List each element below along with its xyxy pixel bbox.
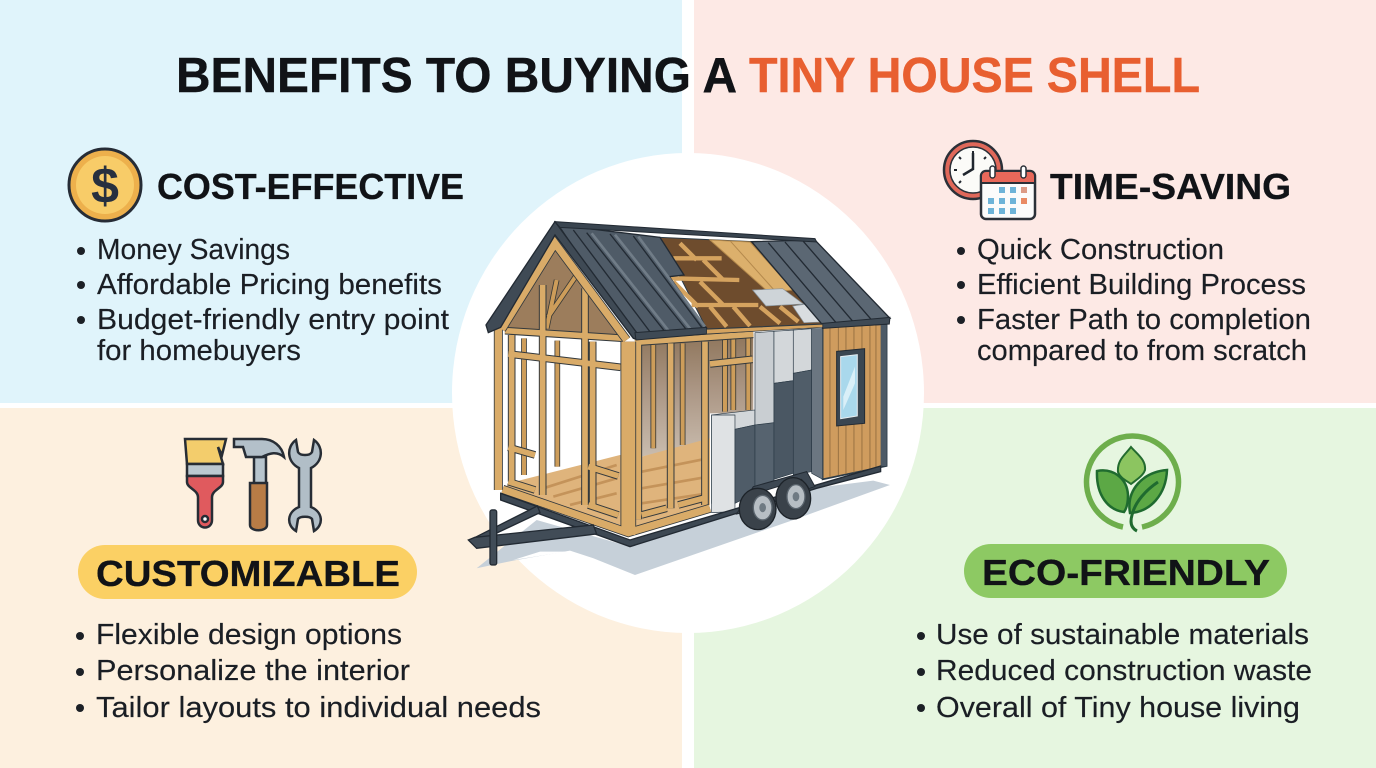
list: time-saving points: Quick Construction (977, 234, 1224, 266)
list: eco-friendly points: Overall of Tiny house living (936, 692, 1300, 724)
list: time-saving points: Faster Path to completion (977, 304, 1311, 336)
icon: dollar coin (69, 149, 141, 221)
panel: customizable background (0, 408, 682, 768)
panel: cost-effective background (0, 0, 682, 403)
heading pill: customizable (78, 545, 417, 599)
panel content: customizable (76, 439, 541, 724)
wall framing studs (498, 243, 753, 535)
top plate (707, 324, 823, 334)
metal roof left (558, 225, 707, 338)
roof foil (753, 289, 803, 306)
panel content: eco-friendly (917, 436, 1312, 724)
list: cost-effective points: Money Savings (97, 234, 290, 266)
trailer hitch (468, 506, 597, 565)
icon: clock and calendar (944, 141, 1035, 219)
roof deck opening (660, 237, 823, 329)
heading pill: customizable: CUSTOMIZABLE (96, 553, 400, 594)
list: cost-effective points (77, 234, 449, 367)
list: eco-friendly points (917, 619, 1312, 724)
roof rafters (669, 243, 798, 327)
list: cost-effective points: Budget-friendly entry point (97, 304, 449, 336)
trailer frame (501, 466, 881, 547)
title: BENEFITS TO BUYING A (176, 49, 737, 103)
icon: wrench (289, 440, 321, 531)
list: cost-effective points: for homebuyers (97, 335, 301, 367)
icon: hammer (234, 439, 284, 530)
ground shadow (477, 481, 890, 575)
white opening through front wall (503, 243, 627, 520)
heading: cost-effective: COST-EFFECTIVE (157, 166, 464, 207)
icon: dollar coin: $ (91, 158, 119, 214)
icon: leaves in ring (1086, 436, 1178, 531)
icon: paint brush (185, 439, 226, 528)
heading pill: eco-friendly (964, 544, 1287, 598)
roof ridge and eaves (555, 222, 817, 242)
panel: eco-friendly background (694, 408, 1376, 768)
window (837, 349, 865, 426)
list: time-saving points (957, 234, 1311, 367)
sheathing panels (712, 329, 823, 513)
list: customizable points: Personalize the interior (96, 655, 410, 687)
illustration: tiny house shell on trailer (468, 222, 890, 575)
list: customizable points (76, 619, 541, 724)
list: eco-friendly points: Use of sustainable materials (936, 619, 1309, 651)
heading pill: eco-friendly: ECO-FRIENDLY (982, 552, 1270, 593)
metal roof right (752, 240, 890, 325)
wheel fender (737, 472, 815, 514)
title (176, 49, 1200, 103)
list: eco-friendly points: Reduced construction waste (936, 655, 1312, 687)
rear wheel (776, 478, 811, 519)
side wall wood section (823, 324, 887, 479)
side wall interior (635, 335, 753, 457)
list: customizable points: Tailor layouts to individual needs (96, 692, 541, 724)
roof plywood (710, 240, 793, 292)
heading: time-saving: TIME-SAVING (1050, 166, 1291, 207)
panel content: time-saving (944, 141, 1311, 367)
floor (505, 438, 710, 528)
list: time-saving points: compared to from scratch (977, 335, 1307, 367)
center white circle (452, 153, 924, 633)
title: TINY HOUSE SHELL (749, 49, 1200, 103)
front wheel (739, 488, 776, 530)
list: customizable points: Flexible design options (96, 619, 402, 651)
list: time-saving points: Efficient Building Process (977, 269, 1306, 301)
list: cost-effective points: Affordable Pricing benefits (97, 269, 442, 301)
panel content: cost-effective (69, 149, 464, 367)
gable interior (507, 247, 620, 336)
panel: time-saving background (694, 0, 1376, 403)
